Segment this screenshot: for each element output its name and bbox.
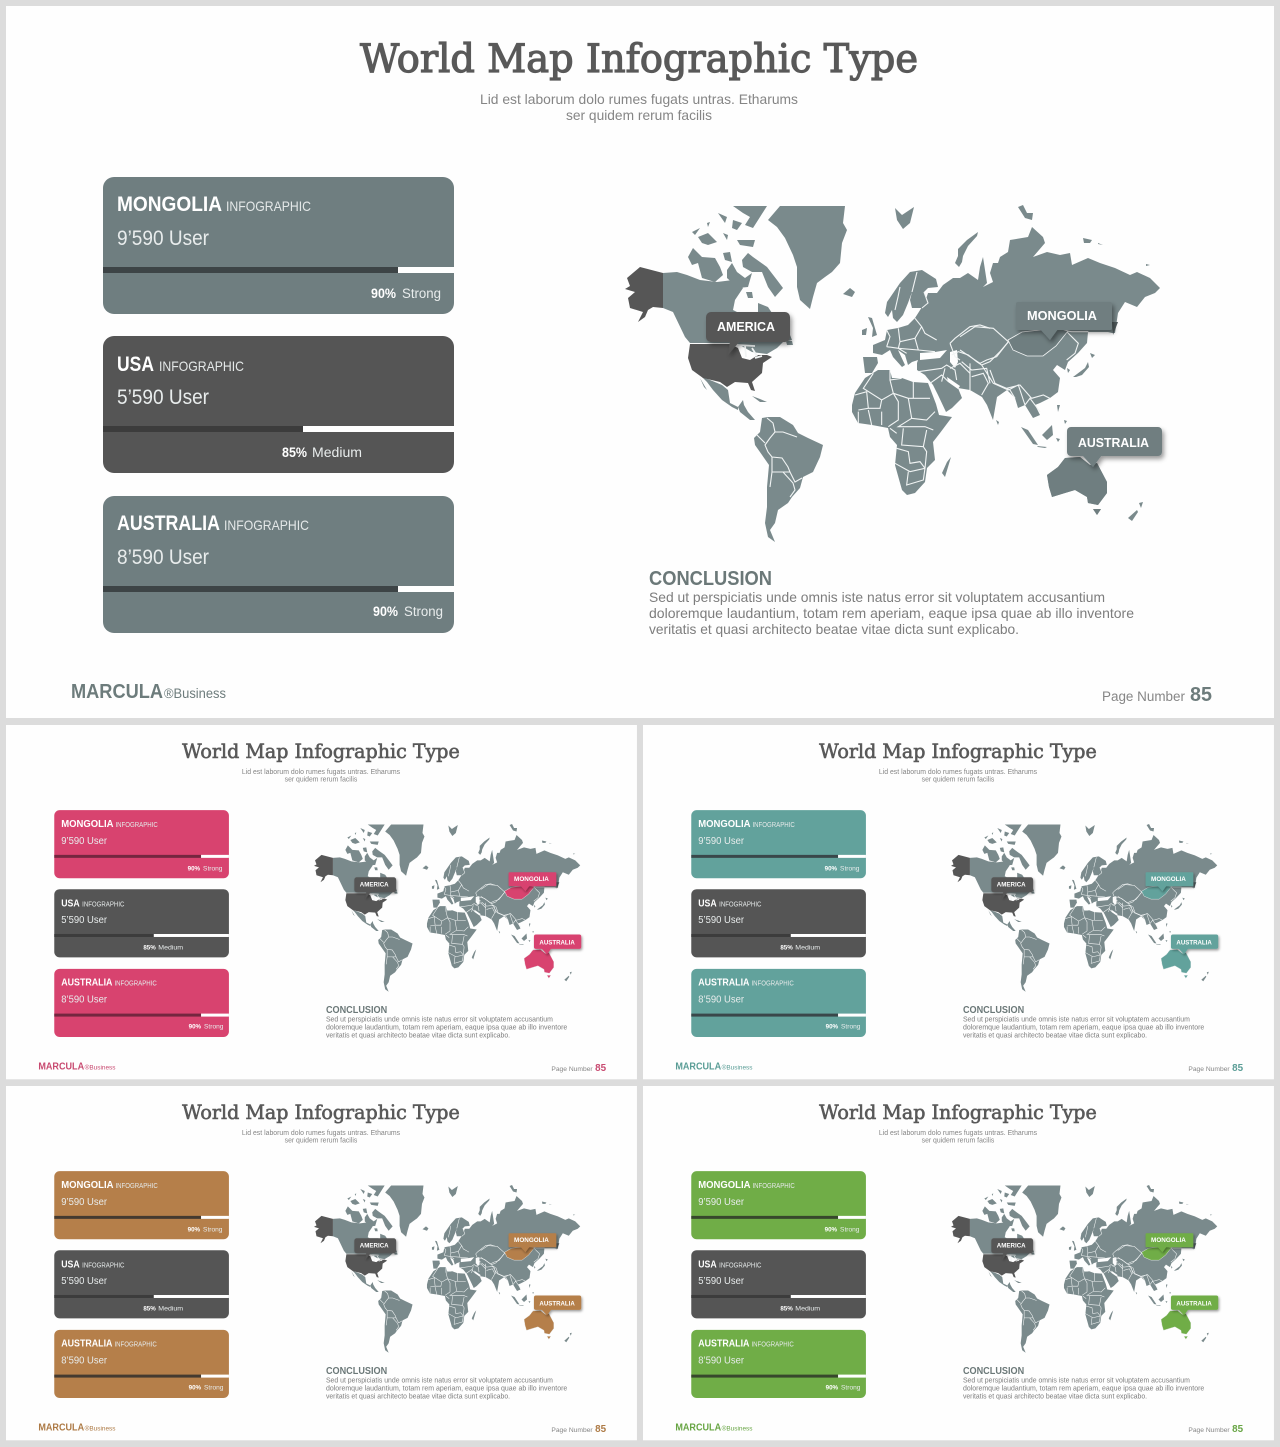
conclusion: veritatis et quasi architecto beatae vitae dicta sunt explicabo. (649, 621, 1019, 637)
card: Mongolia (691, 810, 866, 878)
brand logo: ®Business (85, 1424, 116, 1432)
page number (551, 1424, 607, 1435)
conclusion: doloremque laudantium, totam rem aperiam, eaque ipsa quae ab illo inventore (326, 1025, 567, 1032)
highlighted countries (505, 885, 554, 978)
card: USA: USA (698, 899, 717, 910)
subtitle (879, 769, 1038, 784)
card: Mongolia: Strong (840, 1226, 860, 1233)
card: USA: Medium (795, 944, 821, 951)
brand logo: ®Business (85, 1063, 116, 1071)
card: Australia: 8’590 User (698, 1356, 744, 1367)
card: USA: INFOGRAPHIC (159, 358, 244, 374)
card: Mongolia: INFOGRAPHIC (752, 1183, 795, 1190)
brand logo (675, 1422, 753, 1433)
conclusion: Sed ut perspiciatis unde omnis iste natus error sit voluptatem accusantium (326, 1378, 553, 1385)
conclusion: doloremque laudantium, totam rem aperiam, eaque ipsa quae ab illo inventore (963, 1386, 1204, 1393)
card: USA: 5’590 User (698, 915, 744, 926)
card: Australia: Strong (204, 1385, 224, 1392)
callout: America (991, 1238, 1033, 1260)
page number: Page Number (1188, 1427, 1230, 1434)
conclusion: veritatis et quasi architecto beatae vitae dicta sunt explicabo. (963, 1032, 1147, 1039)
conclusion: veritatis et quasi architecto beatae vitae dicta sunt explicabo. (326, 1393, 510, 1400)
highlighted countries (1142, 885, 1191, 978)
slide: teal version (643, 725, 1274, 1079)
card: USA: Medium (158, 944, 184, 951)
conclusion: CONCLUSION (963, 1366, 1024, 1377)
card: Australia: AUSTRALIA (117, 512, 220, 535)
card: Mongolia: MONGOLIA (698, 819, 751, 830)
subtitle: Lid est laborum dolo rumes fugats untras. Etharums (879, 1130, 1038, 1137)
callout: America: AMERICA (360, 1243, 389, 1250)
callout: America (706, 312, 790, 355)
card: Mongolia: MONGOLIA (61, 819, 114, 830)
callout: Mongolia: MONGOLIA (514, 1237, 549, 1244)
world map (951, 824, 1217, 992)
world map (951, 1185, 1217, 1353)
page number (551, 1063, 607, 1074)
brand logo: MARCULA (675, 1422, 721, 1433)
card: Mongolia: MONGOLIA (61, 1180, 114, 1191)
page number: 85 (1190, 684, 1212, 706)
conclusion: Sed ut perspiciatis unde omnis iste natus error sit voluptatem accusantium (963, 1017, 1190, 1024)
callout: America: AMERICA (717, 319, 775, 334)
card: Australia: 8’590 User (117, 546, 209, 569)
page number: 85 (1232, 1424, 1244, 1435)
conclusion: doloremque laudantium, totam rem aperiam, eaque ipsa quae ab illo inventore (649, 605, 1134, 621)
brand logo: ®Business (722, 1063, 753, 1071)
callout: Mongolia (1146, 872, 1193, 891)
conclusion: doloremque laudantium, totam rem aperiam, eaque ipsa quae ab illo inventore (963, 1025, 1204, 1032)
card: Mongolia: 9’590 User (117, 227, 209, 250)
brand logo (38, 1422, 116, 1433)
card: USA: 85% (780, 1305, 793, 1312)
card: Australia: INFOGRAPHIC (114, 1342, 157, 1349)
callout: Mongolia (509, 1233, 556, 1252)
card: USA (54, 889, 229, 957)
callout: Australia: AUSTRALIA (1176, 1300, 1212, 1307)
page number: Page Number (551, 1427, 593, 1434)
card: Australia: Strong (841, 1385, 861, 1392)
card: Australia: Strong (841, 1024, 861, 1031)
conclusion: CONCLUSION (326, 1005, 387, 1016)
card: Australia: INFOGRAPHIC (751, 981, 794, 988)
conclusion: Sed ut perspiciatis unde omnis iste natus error sit voluptatem accusantium (963, 1378, 1190, 1385)
title: World Map Infographic Type (360, 37, 918, 82)
conclusion: veritatis et quasi architecto beatae vitae dicta sunt explicabo. (326, 1032, 510, 1039)
page number: 85 (595, 1063, 607, 1074)
card: USA: USA (61, 1260, 80, 1271)
brand logo (675, 1061, 753, 1072)
subtitle (879, 1130, 1038, 1145)
card: Mongolia: MONGOLIA (698, 1180, 751, 1191)
conclusion (649, 568, 1134, 637)
card: USA: 5’590 User (698, 1276, 744, 1287)
card: Australia (691, 1330, 866, 1398)
conclusion: CONCLUSION (649, 568, 772, 590)
card: Australia: AUSTRALIA (698, 1339, 750, 1350)
brand logo (71, 681, 226, 703)
subtitle: ser quidem rerum facilis (922, 1138, 995, 1145)
card: USA: 5’590 User (61, 1276, 107, 1287)
subtitle: Lid est laborum dolo rumes fugats untras. Etharums (242, 769, 401, 776)
subtitle: ser quidem rerum facilis (285, 777, 358, 784)
slide: green version (643, 1086, 1274, 1440)
card: USA: INFOGRAPHIC (82, 1263, 124, 1270)
callout: Mongolia: MONGOLIA (1151, 1237, 1186, 1244)
card: USA: INFOGRAPHIC (82, 902, 124, 909)
world map (625, 205, 1160, 542)
conclusion: CONCLUSION (326, 1366, 387, 1377)
subtitle: Lid est laborum dolo rumes fugats untras. Etharums (480, 91, 798, 107)
slide: pink version (6, 725, 637, 1079)
card: Australia (103, 496, 454, 633)
brand logo: MARCULA (38, 1422, 84, 1433)
card: Mongolia: INFOGRAPHIC (752, 822, 795, 829)
callout: Australia: AUSTRALIA (539, 939, 575, 946)
highlighted countries (1008, 328, 1107, 515)
card: USA: 5’590 User (117, 386, 209, 409)
title: World Map Infographic Type (182, 740, 460, 763)
callout: America (354, 877, 396, 899)
callout: America: AMERICA (997, 882, 1026, 889)
subtitle: ser quidem rerum facilis (566, 107, 712, 123)
page number: Page Number (1188, 1066, 1230, 1073)
card: Mongolia: Strong (203, 1226, 223, 1233)
conclusion (326, 1005, 567, 1039)
card: USA (103, 336, 454, 473)
card: Mongolia: 9’590 User (698, 836, 744, 847)
card: Mongolia: 9’590 User (61, 836, 107, 847)
card: USA (691, 889, 866, 957)
page number: 85 (595, 1424, 607, 1435)
callout: Australia (1171, 934, 1218, 954)
page number: Page Number (551, 1066, 593, 1073)
card: USA: Medium (312, 445, 362, 460)
brand logo (38, 1061, 116, 1072)
card: Mongolia: Strong (402, 286, 441, 301)
card: Mongolia: Strong (840, 865, 860, 872)
world map (314, 1185, 580, 1353)
callout: Australia (1171, 1295, 1218, 1315)
callout: Australia (1067, 427, 1162, 467)
card: Australia: 90% (826, 1024, 838, 1031)
conclusion: veritatis et quasi architecto beatae vitae dicta sunt explicabo. (963, 1393, 1147, 1400)
card: USA: 85% (143, 944, 156, 951)
card: USA: 85% (143, 1305, 156, 1312)
conclusion: CONCLUSION (963, 1005, 1024, 1016)
card: Australia: 90% (189, 1385, 201, 1392)
conclusion: Sed ut perspiciatis unde omnis iste natus error sit voluptatem accusantium (326, 1017, 553, 1024)
subtitle (480, 91, 798, 123)
card: Australia: 90% (826, 1385, 838, 1392)
callout: Mongolia: MONGOLIA (514, 876, 549, 883)
card: Mongolia (54, 1171, 229, 1239)
card: USA: INFOGRAPHIC (719, 1263, 761, 1270)
brand logo: MARCULA (71, 681, 163, 703)
card: Australia (691, 969, 866, 1037)
card: Mongolia: 90% (825, 1226, 837, 1233)
callout: America (354, 1238, 396, 1260)
brand logo: ®Business (164, 686, 226, 701)
brand logo: MARCULA (38, 1061, 84, 1072)
callout: America: AMERICA (360, 882, 389, 889)
subtitle: ser quidem rerum facilis (922, 777, 995, 784)
page number (1188, 1063, 1244, 1074)
card: Mongolia: 90% (188, 1226, 200, 1233)
card: Mongolia: 90% (825, 865, 837, 872)
card: USA: 5’590 User (61, 915, 107, 926)
subtitle (242, 1130, 401, 1145)
callout: America: AMERICA (997, 1243, 1026, 1250)
subtitle: Lid est laborum dolo rumes fugats untras. Etharums (242, 1130, 401, 1137)
card: USA: Medium (158, 1305, 184, 1312)
card: Australia: 8’590 User (61, 1356, 107, 1367)
conclusion (963, 1005, 1204, 1039)
page number: Page Number (1102, 689, 1185, 704)
subtitle: ser quidem rerum facilis (285, 1138, 358, 1145)
card: USA (54, 1250, 229, 1318)
title: World Map Infographic Type (182, 1101, 460, 1124)
brand logo: MARCULA (675, 1061, 721, 1072)
slide: brown version (6, 1086, 637, 1440)
page number: 85 (1232, 1063, 1244, 1074)
card: Mongolia: INFOGRAPHIC (115, 822, 158, 829)
card: Australia: 90% (373, 604, 398, 619)
card: Australia: INFOGRAPHIC (224, 517, 309, 533)
card: Mongolia (103, 177, 454, 314)
card: Mongolia: 9’590 User (698, 1197, 744, 1208)
card: USA: USA (117, 353, 154, 376)
callout: Australia: AUSTRALIA (1176, 939, 1212, 946)
card: Mongolia: INFOGRAPHIC (115, 1183, 158, 1190)
card: Australia (54, 1330, 229, 1398)
page number (1188, 1424, 1244, 1435)
callout: Mongolia (1146, 1233, 1193, 1252)
card: Australia (54, 969, 229, 1037)
card: USA (691, 1250, 866, 1318)
card: Mongolia: 90% (188, 865, 200, 872)
page number (1102, 684, 1212, 706)
card: USA: USA (61, 899, 80, 910)
title: World Map Infographic Type (819, 1101, 1097, 1124)
callout: Australia (534, 1295, 581, 1315)
card: Mongolia: Strong (203, 865, 223, 872)
card: Australia: 8’590 User (61, 995, 107, 1006)
conclusion (326, 1366, 567, 1400)
card: Mongolia (691, 1171, 866, 1239)
subtitle (242, 769, 401, 784)
card: Australia: Strong (204, 1024, 224, 1031)
card: Australia: INFOGRAPHIC (751, 1342, 794, 1349)
callout: Mongolia: MONGOLIA (1027, 308, 1097, 323)
card: Mongolia: 90% (371, 286, 396, 301)
card: USA: 85% (282, 445, 307, 460)
card: USA: Medium (795, 1305, 821, 1312)
callout: Australia: AUSTRALIA (1078, 435, 1149, 450)
card: Mongolia: MONGOLIA (117, 193, 222, 216)
card: Australia: INFOGRAPHIC (114, 981, 157, 988)
conclusion: doloremque laudantium, totam rem aperiam, eaque ipsa quae ab illo inventore (326, 1386, 567, 1393)
callout: Mongolia: MONGOLIA (1151, 876, 1186, 883)
conclusion (963, 1366, 1204, 1400)
card: Australia: Strong (404, 604, 443, 619)
card: Mongolia: 9’590 User (61, 1197, 107, 1208)
subtitle: Lid est laborum dolo rumes fugats untras. Etharums (879, 769, 1038, 776)
card: Mongolia (54, 810, 229, 878)
card: USA: USA (698, 1260, 717, 1271)
card: Australia: AUSTRALIA (698, 978, 750, 989)
title: World Map Infographic Type (819, 740, 1097, 763)
callout: Australia (534, 934, 581, 954)
brand logo: ®Business (722, 1424, 753, 1432)
callout: Mongolia (509, 872, 556, 891)
card: USA: 85% (780, 944, 793, 951)
card: USA: INFOGRAPHIC (719, 902, 761, 909)
callout: America (991, 877, 1033, 899)
slide: large grey version (6, 6, 1274, 718)
card: Australia: 90% (189, 1024, 201, 1031)
card: Australia: 8’590 User (698, 995, 744, 1006)
card: Australia: AUSTRALIA (61, 1339, 113, 1350)
highlighted countries (505, 1246, 554, 1339)
callout: Mongolia (1016, 302, 1112, 340)
callout: Australia: AUSTRALIA (539, 1300, 575, 1307)
card: Mongolia: INFOGRAPHIC (226, 198, 311, 214)
card: Australia: AUSTRALIA (61, 978, 113, 989)
highlighted countries (1142, 1246, 1191, 1339)
world map (314, 824, 580, 992)
conclusion: Sed ut perspiciatis unde omnis iste natus error sit voluptatem accusantium (649, 589, 1105, 605)
